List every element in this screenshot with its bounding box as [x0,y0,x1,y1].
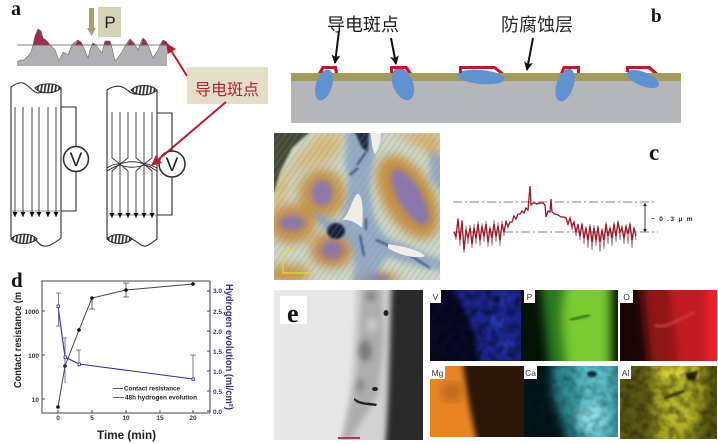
element map: Ca [524,366,618,437]
element map: V [430,290,521,361]
red arrow to contact [152,102,226,165]
right axis labels [213,288,222,416]
x axis labels: 10 [122,415,130,422]
left conductor with voltmeter [11,83,88,246]
element map: Al [620,366,717,439]
left axis labels [25,309,39,404]
callout: conductive spots [187,67,268,104]
panel b: corrosion-resistant layer cross-section [291,6,681,123]
corrosion-resistant coating [291,73,681,81]
legend [113,386,197,402]
pressure arrow and label P: P [104,13,116,32]
panel a: conductive spot mechanism [11,0,268,246]
left axis labels: 100 [28,353,39,360]
legend: 48h hydrogen evolution [125,396,197,402]
arrow 3 [527,38,533,70]
arrow 2 [391,38,396,64]
height profile trace [454,186,636,253]
x axis labels: 5 [90,415,94,422]
voltmeter symbol right: V [166,155,179,176]
panel b label: b [651,6,662,27]
contact resistance series [56,282,195,409]
panel c: microscopy surface image [274,133,440,280]
arrow 1 [335,31,339,63]
surface roughness profile [17,29,168,66]
element map: P [521,290,618,361]
panel d: line chart [11,268,234,442]
label V: V [433,292,439,302]
panel e label box [280,296,307,324]
right axis labels: 1.0 [213,369,222,376]
scale bar [338,437,360,439]
label Mg: Mg [432,368,444,378]
right axis labels: 0.5 [213,389,222,396]
height annotation: ~ 0 .3 μ m [651,216,694,223]
label: corrosion-resistant layer: 防腐蚀层 [501,15,573,35]
x axis labels [56,415,197,422]
panel e: TEM image [274,290,423,440]
legend: Contact resistance [124,386,181,392]
left axis labels: 1000 [25,309,39,316]
label Al: Al [622,368,629,378]
right axis labels: 0.0 [213,409,222,416]
label P: P [527,292,533,302]
substrate [291,81,681,123]
reference dashed lines [453,202,658,232]
conductive spots [312,64,661,104]
label Ca: Ca [525,368,536,378]
right axis labels: 2.0 [213,329,222,336]
panel c: line profile [453,140,694,253]
x axis labels: 15 [156,415,164,422]
label O: O [623,292,630,302]
x axis labels: 0 [56,415,60,422]
panel d label: d [11,268,23,292]
right axis labels: 3.0 [213,288,222,295]
panel e label box: e [287,299,299,328]
left axis labels: 10 [32,397,39,404]
element map: O [620,290,717,361]
right axis labels: 2.5 [213,309,222,316]
scale axes [283,249,312,273]
element map: Mg [430,366,524,437]
x axis title: Time (min) [97,428,156,442]
plot frame [42,281,210,413]
height marker [644,203,646,232]
right axis title: Hydrogen evolution (ml/cm²) [223,284,234,410]
panel c label: c [649,140,659,165]
pressure arrow and label P [87,7,121,37]
label: conductive spots: 导电斑点 [327,15,399,35]
voltmeter symbol left: V [70,150,83,171]
right conductor with voltmeter and contact spots [107,86,185,246]
red arrow to profile [167,44,187,76]
hydrogen evolution series [56,293,196,383]
callout: conductive spots: 导电斑点 [195,81,259,99]
x axis labels: 20 [189,415,197,422]
left axis title: Contact resistance (m [13,292,24,388]
right axis labels: 1.5 [213,349,222,356]
bright particles [342,133,425,257]
